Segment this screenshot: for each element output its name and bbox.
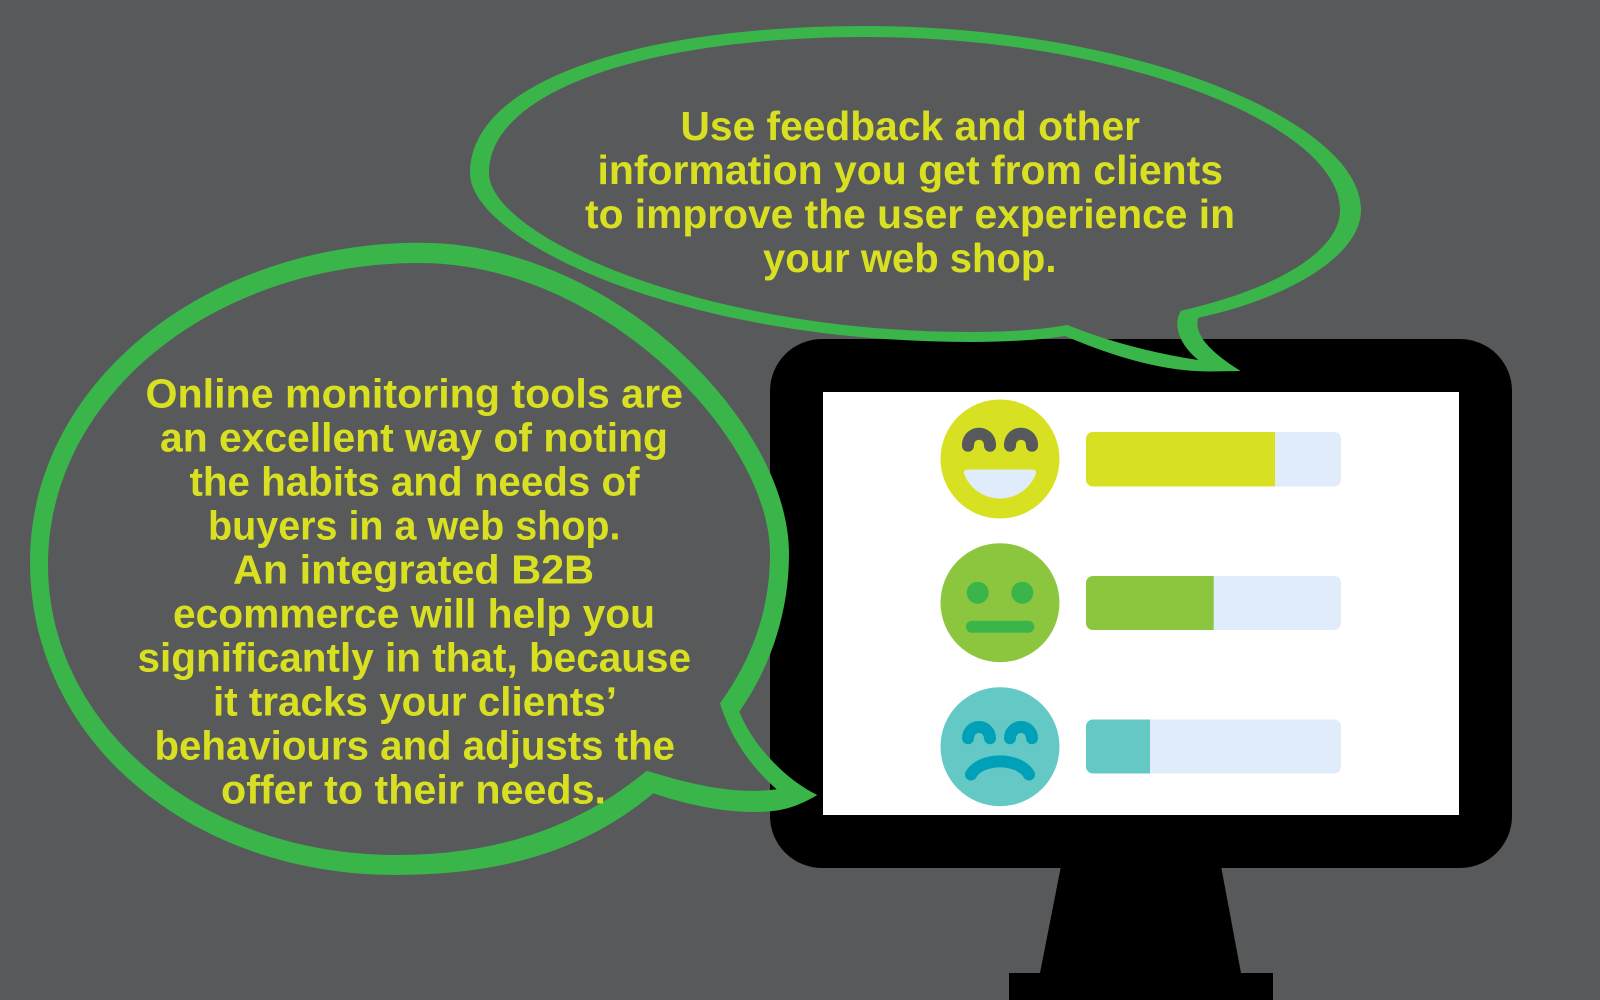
- speech bubble: top: [470, 26, 1361, 372]
- text: left bubble message: an excellent way of noting: [160, 414, 668, 460]
- text: left bubble message: ecommerce will help you: [173, 590, 655, 636]
- monitor: [770, 339, 1512, 1000]
- monitor stand: [1009, 866, 1273, 1000]
- text: left bubble message: it tracks your clients’: [213, 678, 617, 724]
- icon: neutral face: [940, 543, 1060, 662]
- text: left bubble message: significantly in that, because: [138, 634, 691, 680]
- bar: sad rating: [1086, 720, 1341, 774]
- icon: sad face: [940, 687, 1060, 806]
- text: top bubble message: to improve the user experience in: [585, 191, 1235, 237]
- text: left bubble message: offer to their needs.: [221, 766, 606, 812]
- text: top bubble message: Use feedback and other: [680, 103, 1140, 149]
- text: top bubble message: your web shop.: [763, 235, 1056, 281]
- monitor screen: [823, 392, 1459, 815]
- text: top bubble message: [585, 103, 1235, 281]
- text: left bubble message: An integrated B2B: [233, 546, 594, 592]
- icon: happy face: [940, 400, 1060, 518]
- text: left bubble message: Online monitoring tools are: [146, 370, 683, 416]
- text: left bubble message: [138, 370, 691, 812]
- text: left bubble message: behaviours and adjusts the: [154, 722, 675, 768]
- text: left bubble message: buyers in a web shop.: [208, 502, 620, 548]
- monitor frame: [770, 339, 1512, 868]
- bar: happy rating: [1086, 432, 1341, 486]
- text: left bubble message: the habits and needs of: [190, 458, 640, 504]
- bar: neutral rating: [1086, 576, 1341, 630]
- text: top bubble message: information you get from clients: [598, 147, 1223, 193]
- speech bubble: left: [30, 243, 817, 875]
